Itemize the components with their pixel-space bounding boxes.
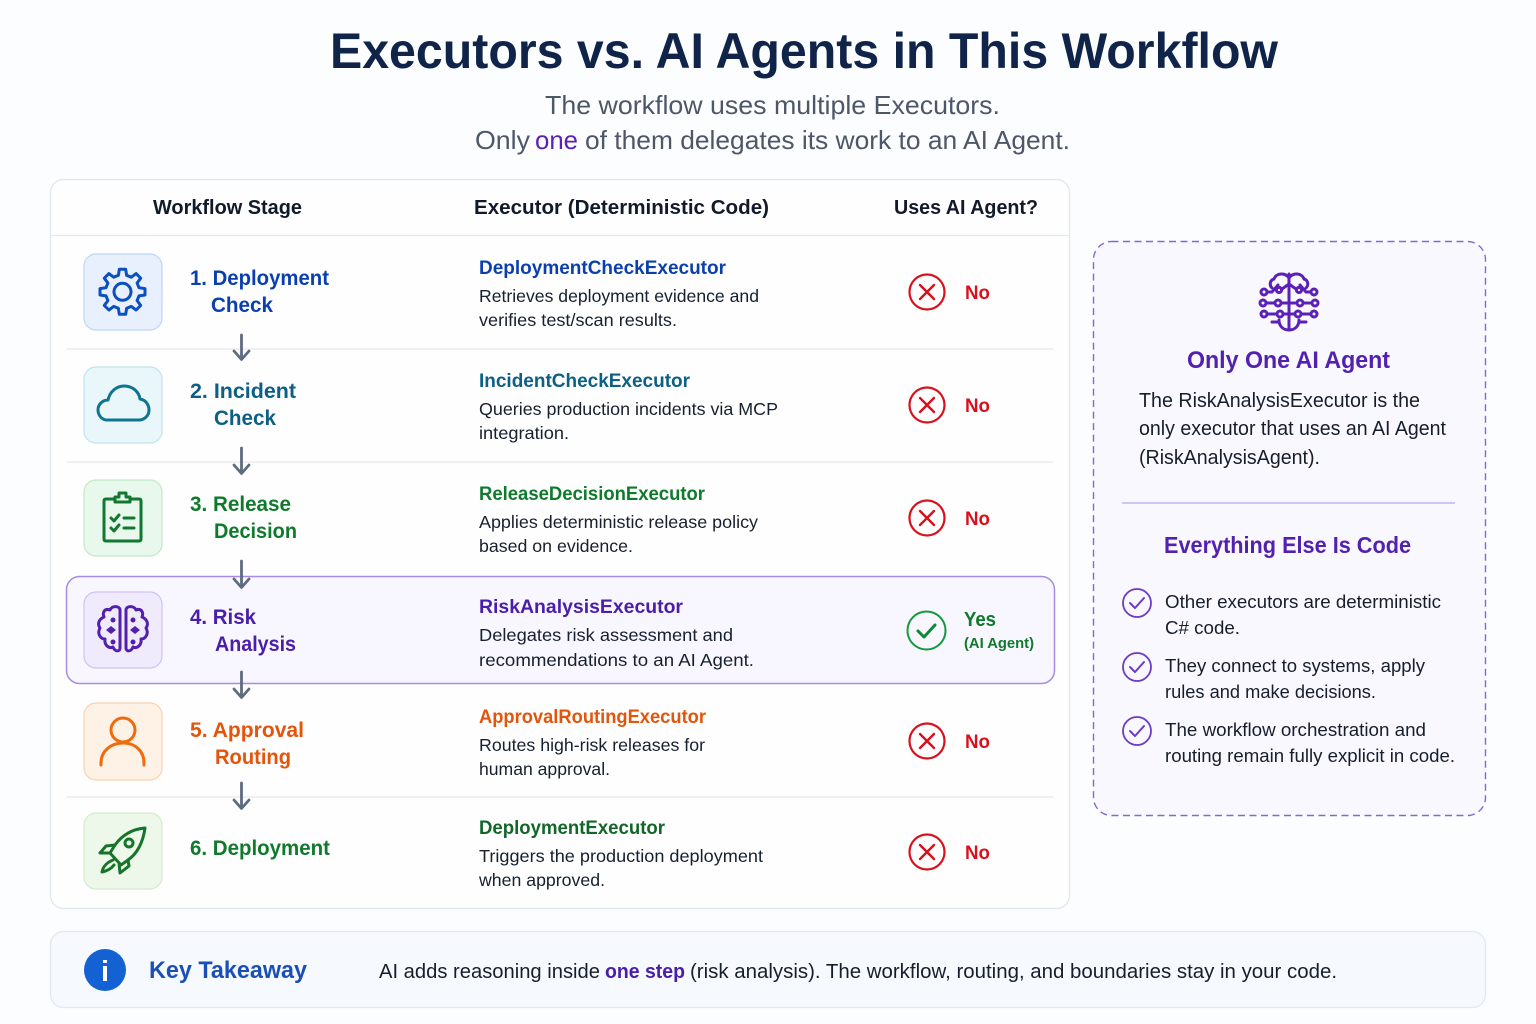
executor text 3: ReleaseDecisionExecutor	[479, 483, 705, 505]
executor text 3	[479, 483, 758, 556]
status: no: No	[965, 282, 990, 304]
table header: Workflow Stage	[153, 197, 302, 219]
stage label 5: 5. Approval	[190, 718, 304, 742]
status: no	[910, 388, 990, 422]
executor text 6: DeploymentExecutor	[479, 817, 665, 839]
executor text 4: RiskAnalysisExecutor	[479, 596, 683, 618]
executor text 5: Routes high-risk releases for	[479, 735, 705, 755]
table header	[153, 197, 1038, 219]
stage label 3: Decision	[214, 519, 297, 543]
panel: key takeaway	[50, 932, 1486, 1008]
check item 2: They connect to systems, apply	[1165, 655, 1426, 676]
takeaway text	[379, 961, 1337, 983]
stage label 2	[190, 379, 296, 430]
status: no: No	[965, 731, 990, 753]
executor text 2	[479, 370, 778, 443]
status: no: No	[965, 508, 990, 530]
row 5: approval routing	[84, 703, 990, 780]
executor text 1: DeploymentCheckExecutor	[479, 257, 726, 279]
subtitle: of them delegates its work to an AI Agent.	[585, 125, 1070, 155]
status: no	[910, 274, 990, 310]
takeaway text: one step	[605, 961, 685, 983]
subtitle: The workflow uses multiple Executors.	[545, 90, 1000, 120]
executor text 4: recommendations to an AI Agent.	[479, 650, 754, 670]
heading: everything else is code: Everything Else Is Code	[1164, 532, 1411, 558]
icon: info	[84, 949, 126, 991]
check item 3	[1123, 717, 1455, 766]
executor text 1	[479, 257, 759, 330]
icon: person	[84, 703, 162, 780]
executor text 1: Retrieves deployment evidence and	[479, 286, 759, 306]
executor text 4: Delegates risk assessment and	[479, 625, 733, 645]
executor text 4	[479, 596, 754, 670]
executor text 3: Applies deterministic release policy	[479, 512, 758, 532]
heading: key takeaway: Key Takeaway	[149, 957, 308, 984]
row 3: release decision	[84, 480, 990, 556]
row 1: deployment check	[84, 254, 990, 330]
stage label 3: 3. Release	[190, 492, 291, 516]
stage label 5	[190, 718, 304, 769]
status: yes	[908, 609, 1034, 652]
stage label 1: 1. Deployment	[190, 266, 329, 290]
arrows between stages	[234, 335, 249, 808]
heading: only one AI agent: Only One AI Agent	[1187, 347, 1390, 374]
status: yes: Yes	[964, 609, 996, 631]
status: no	[910, 724, 990, 758]
stage label 1: Check	[211, 293, 273, 317]
description text	[1139, 390, 1446, 469]
takeaway text: AI adds reasoning inside	[379, 961, 600, 983]
executor text 2: integration.	[479, 423, 569, 443]
subtitle	[475, 90, 1070, 155]
executor text 2: Queries production incidents via MCP	[479, 399, 778, 419]
executor text 5: human approval.	[479, 759, 610, 779]
row 4: risk analysis	[84, 592, 1034, 670]
row 2: incident check	[84, 367, 990, 443]
stage label 2: 2. Incident	[190, 379, 296, 403]
stage label 5: Routing	[215, 745, 291, 769]
executor text 6: when approved.	[478, 870, 605, 890]
status: yes: (AI Agent)	[964, 636, 1034, 652]
check item 3: routing remain fully explicit in code.	[1165, 745, 1455, 766]
icon: cloud	[84, 367, 162, 443]
takeaway text: (risk analysis). The workflow, routing, and boundaries stay in your code.	[690, 961, 1337, 983]
icon: clipboard	[84, 480, 162, 556]
stage label 4	[190, 605, 296, 656]
check item 1: C# code.	[1165, 617, 1240, 638]
description text: only executor that uses an AI Agent	[1139, 418, 1446, 440]
status: no: No	[965, 395, 990, 417]
status: no	[910, 500, 990, 536]
stage label 4: 4. Risk	[190, 605, 256, 629]
executor text 5	[479, 706, 706, 779]
executor text 6	[478, 817, 763, 890]
check item 2: rules and make decisions.	[1165, 681, 1376, 702]
highlighted row background	[66, 576, 1054, 684]
description text: (RiskAnalysisAgent).	[1139, 447, 1320, 469]
executor text 1: verifies test/scan results.	[479, 310, 677, 330]
icon: rocket	[84, 813, 162, 889]
status: no: No	[965, 842, 990, 864]
executor text 3: based on evidence.	[479, 536, 633, 556]
subtitle: one	[535, 125, 578, 155]
stage label 6: 6. Deployment	[190, 836, 330, 860]
check item 1: Other executors are deterministic	[1165, 591, 1441, 612]
table header: Uses AI Agent?	[894, 197, 1038, 219]
title: Executors vs. AI Agents in This Workflow	[330, 23, 1278, 79]
check item 3: The workflow orchestration and	[1165, 719, 1426, 740]
icon: brain	[84, 592, 162, 668]
table header: Executor (Deterministic Code)	[474, 197, 769, 219]
stage label 1	[190, 266, 329, 317]
panel: workflow table	[50, 180, 1070, 908]
stage label 2: Check	[214, 406, 276, 430]
row 6: deployment	[84, 813, 990, 890]
status: no	[910, 834, 990, 870]
icon: gear	[84, 254, 162, 330]
icon: info: i	[101, 956, 109, 988]
subtitle: Only	[475, 125, 530, 155]
description text: The RiskAnalysisExecutor is the	[1139, 390, 1420, 412]
executor text 2: IncidentCheckExecutor	[479, 370, 690, 392]
check item 2	[1123, 653, 1426, 702]
icon: circuit brain	[1260, 274, 1318, 330]
panel: only one AI agent	[1094, 242, 1486, 816]
executor text 5: ApprovalRoutingExecutor	[479, 706, 706, 728]
stage label 3	[190, 492, 297, 543]
stage label 4: Analysis	[215, 632, 296, 656]
executor text 6: Triggers the production deployment	[479, 846, 763, 866]
check item 1	[1123, 589, 1441, 638]
